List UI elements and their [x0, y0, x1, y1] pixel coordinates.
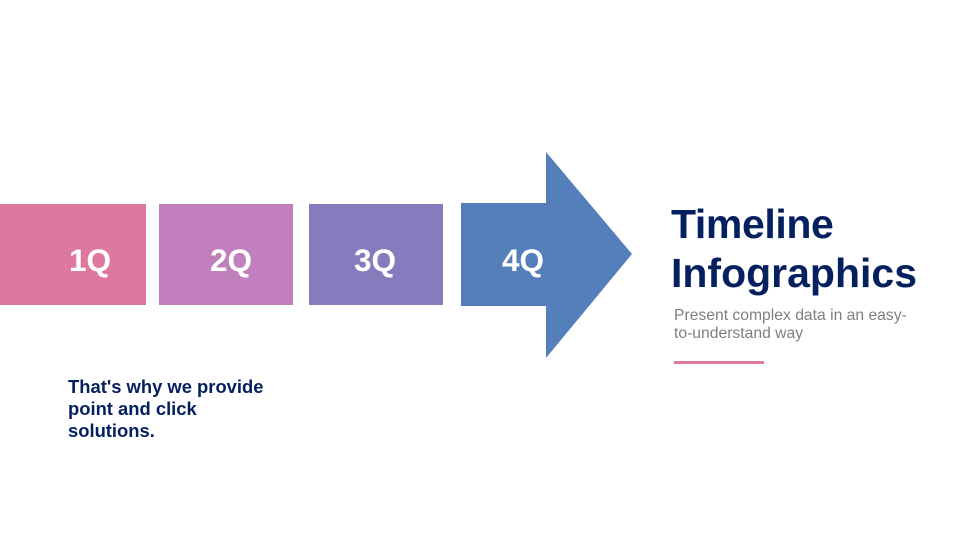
label: 2Q: 2Q — [210, 242, 252, 278]
text block: solutions note: That's why we provide — [68, 376, 263, 397]
label: 3Q: 3Q — [354, 242, 396, 278]
panel: 3Q block — [309, 204, 443, 305]
subtitle text — [674, 307, 907, 342]
label: 1Q: 1Q — [69, 242, 111, 278]
text block: solutions note: solutions. — [68, 420, 155, 441]
text block: solutions note — [68, 376, 263, 441]
label: 4Q: 4Q — [502, 242, 544, 278]
panel: 2Q block — [159, 204, 293, 305]
arrow: 4Q — [461, 152, 632, 358]
panel: 1Q block — [0, 204, 146, 305]
accent underline — [674, 361, 764, 364]
text block: solutions note: point and click — [68, 398, 197, 419]
subtitle text: Present complex data in an easy- — [674, 307, 907, 324]
title: Timeline — [671, 201, 833, 247]
title — [671, 201, 917, 296]
subtitle text: to-understand way — [674, 324, 803, 342]
title: Infographics — [671, 250, 917, 296]
